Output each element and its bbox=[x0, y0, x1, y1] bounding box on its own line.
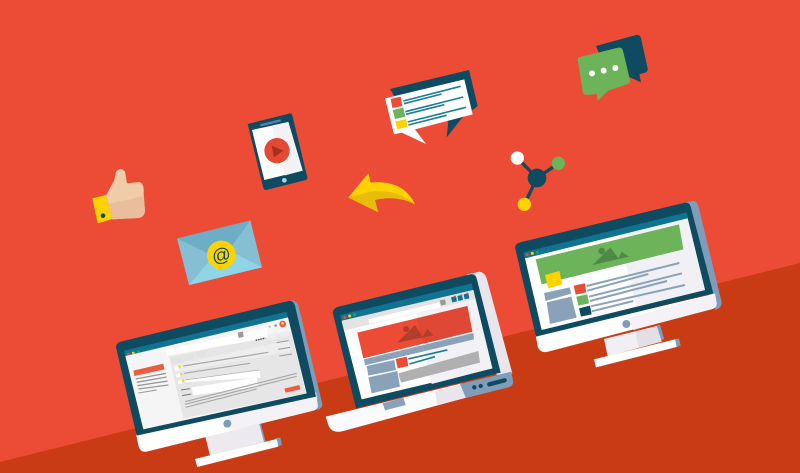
hinge bbox=[383, 398, 406, 410]
buttons row bbox=[171, 351, 206, 364]
window dots bbox=[343, 313, 356, 319]
screen bbox=[525, 218, 705, 330]
window dots bbox=[127, 350, 140, 355]
image icon bbox=[397, 325, 433, 343]
chin bbox=[136, 393, 318, 452]
green banner bbox=[536, 224, 683, 284]
blue boxes bbox=[367, 360, 400, 393]
toolbar bbox=[166, 321, 289, 356]
icon: thumbs up bbox=[92, 169, 145, 223]
power button bbox=[622, 320, 630, 328]
screen frame bbox=[116, 301, 316, 436]
title bar bbox=[340, 283, 473, 322]
icon: list speech bubble bbox=[385, 70, 478, 144]
title bar bbox=[523, 212, 688, 259]
title bar bbox=[124, 312, 288, 357]
icon: reply arrow bbox=[348, 173, 415, 212]
window dots bbox=[526, 251, 539, 256]
monitor: profile page bbox=[515, 201, 722, 367]
screen bbox=[125, 317, 307, 429]
base grey section bbox=[435, 384, 467, 405]
icon: email envelope: @ bbox=[210, 243, 232, 267]
reply form bbox=[181, 341, 300, 407]
chin bbox=[536, 294, 717, 352]
stand bbox=[195, 423, 282, 467]
sidebar items bbox=[133, 364, 168, 393]
screen frame bbox=[515, 203, 713, 337]
screen frame bbox=[333, 274, 501, 408]
red banner bbox=[357, 306, 472, 358]
message rows bbox=[173, 340, 290, 384]
article thumbnail bbox=[396, 357, 408, 368]
screen bbox=[342, 290, 492, 399]
keyboard deck bbox=[460, 372, 513, 398]
list thumbnails bbox=[574, 283, 592, 317]
icons group: thumb, phone, envelope bbox=[92, 113, 307, 285]
blue bar bbox=[364, 333, 474, 365]
icon: chat bubbles bbox=[578, 35, 648, 101]
stand bbox=[594, 325, 681, 367]
monitor side edge bbox=[285, 300, 322, 410]
monitor: email client bbox=[116, 300, 322, 467]
article lines bbox=[408, 350, 447, 364]
base bbox=[326, 383, 467, 432]
image icon bbox=[593, 247, 629, 265]
power button bbox=[223, 420, 231, 428]
laptop: photo page bbox=[326, 272, 513, 432]
icon: email envelope bbox=[177, 220, 262, 285]
profile square bbox=[545, 271, 562, 288]
main panel bbox=[169, 332, 306, 418]
lid back edge bbox=[467, 272, 512, 375]
icon: phone bbox=[248, 113, 307, 190]
icons group: chat, molecule, arrow bbox=[348, 35, 648, 212]
grey block bbox=[398, 351, 480, 383]
list lines bbox=[587, 263, 685, 311]
monitor side edge bbox=[685, 201, 722, 310]
blue boxes bbox=[544, 287, 577, 324]
diagonal floor bbox=[0, 263, 800, 473]
icon: network molecule bbox=[511, 151, 565, 211]
toolbar bbox=[342, 290, 475, 331]
